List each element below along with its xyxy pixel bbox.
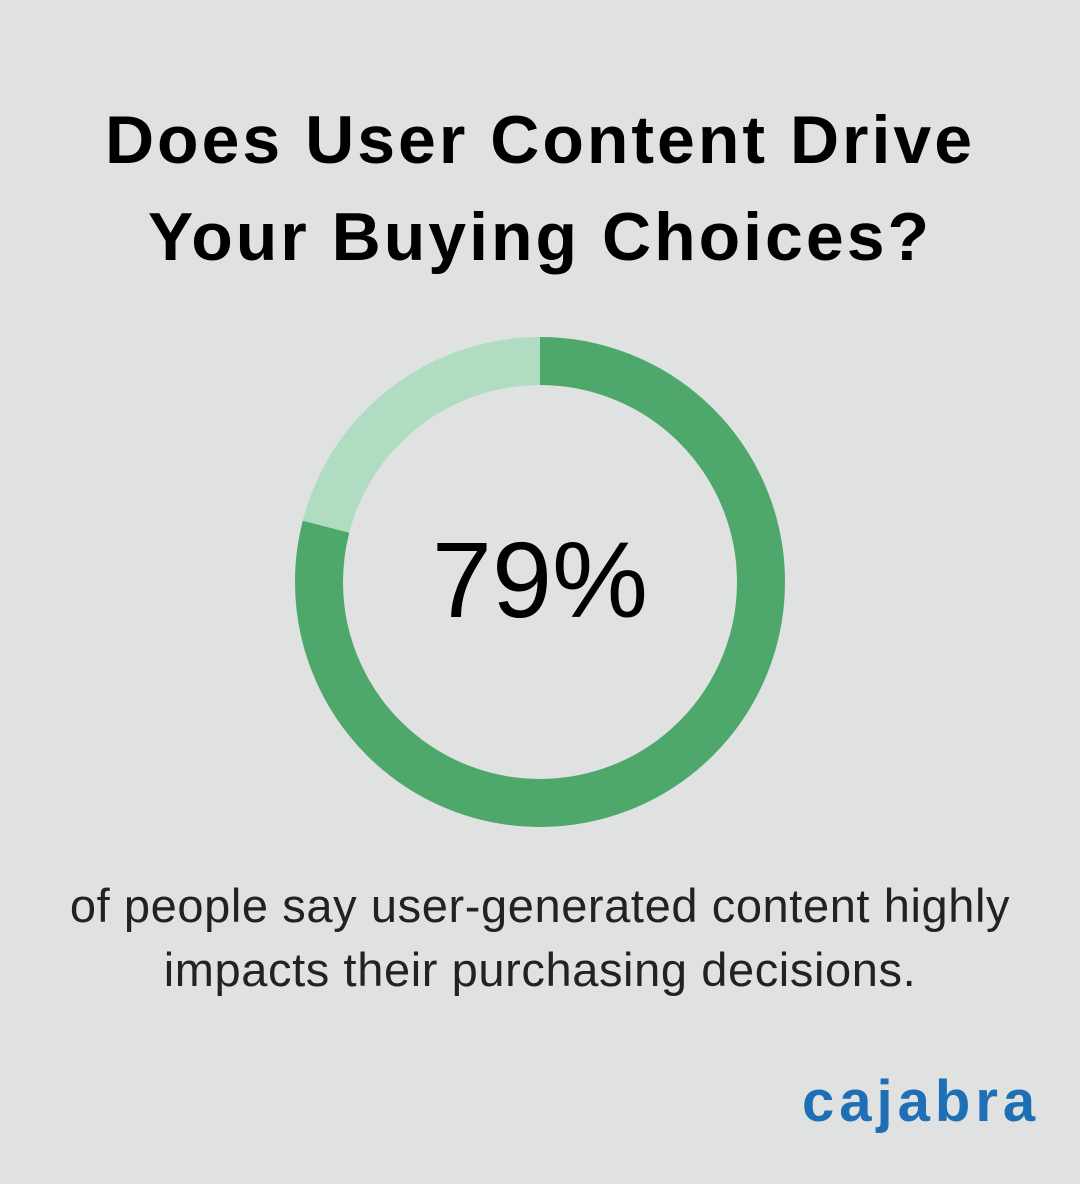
title: Does User Content Drive xyxy=(105,102,975,178)
percentage value: 79% xyxy=(432,519,648,640)
title xyxy=(105,102,975,275)
logo: cajabra xyxy=(802,1069,1040,1134)
description: impacts their purchasing decisions. xyxy=(164,943,916,996)
title: Your Buying Choices? xyxy=(148,199,932,275)
description xyxy=(70,879,1010,996)
description: of people say user-generated content highly xyxy=(70,879,1010,932)
